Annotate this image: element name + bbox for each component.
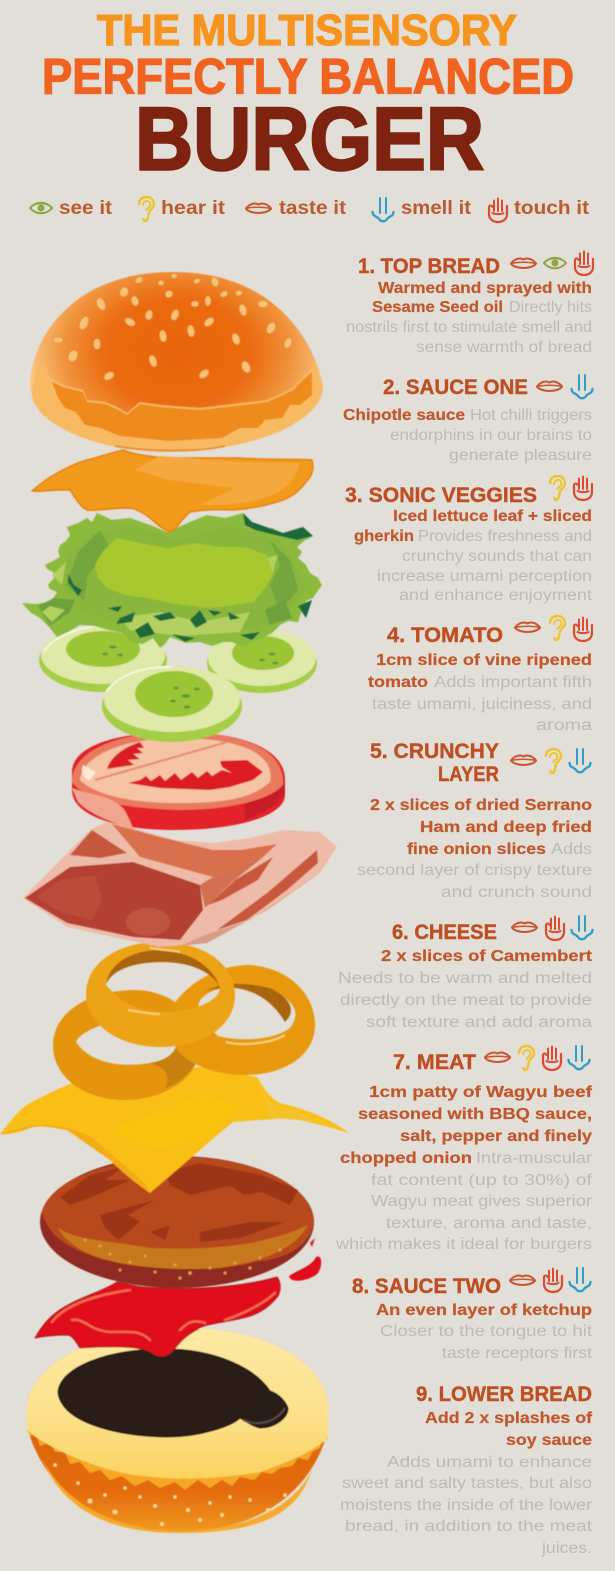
description: salt, pepper and finely [400, 1128, 592, 1145]
description: Wagyu meat gives superior [371, 1193, 592, 1210]
sense icons [511, 252, 593, 275]
legend: smell it [372, 198, 472, 221]
description: Ham and deep fried [420, 819, 592, 836]
sense icons [485, 1046, 590, 1070]
description: Adds umami to enhance [387, 1454, 592, 1471]
description: bread, in addition to the meat [345, 1518, 593, 1535]
description [376, 1302, 593, 1362]
description: 2 x slices of Camembert [381, 948, 592, 965]
description: sweet and salty tastes, but also [342, 1475, 592, 1492]
lower bun [27, 1328, 328, 1533]
description: which makes it ideal for burgers [335, 1236, 592, 1253]
description: directly on the meat to provide [340, 992, 592, 1009]
layer 5: crunchy layer [357, 740, 592, 901]
description: texture, aroma and taste, [386, 1215, 592, 1232]
heading: 4. TOMATO [387, 624, 503, 647]
ham fat over tomato [72, 788, 134, 830]
description: increase umami perception [377, 568, 592, 585]
heading: 6. CHEESE [392, 921, 497, 944]
heading: 3. SONIC VEGGIES [345, 484, 537, 507]
sense icons [515, 616, 592, 641]
layer 7: meat [335, 1046, 593, 1253]
cucumber slices [39, 626, 317, 742]
legend: touch it: touch it [514, 198, 590, 219]
tomato slice [72, 732, 285, 830]
legend: touch it [489, 198, 590, 222]
description: fine onion slices [407, 841, 546, 858]
description: soy sauce [506, 1432, 592, 1449]
description: taste receptors first [442, 1345, 593, 1362]
description: second layer of crispy texture [357, 862, 592, 879]
legend: hear it [139, 197, 226, 221]
description: Warmed and sprayed with [378, 280, 592, 297]
layer 9: lower bread [340, 1383, 593, 1557]
description [354, 508, 593, 604]
description [340, 1410, 593, 1557]
heading: 9. LOWER BREAD [416, 1383, 592, 1406]
description: Adds important fifth [434, 674, 592, 691]
legend: see it [30, 198, 113, 219]
description [335, 1084, 593, 1253]
title: BURGER [135, 88, 484, 188]
description: chopped onion [340, 1150, 472, 1167]
legend: taste it: taste it [279, 198, 347, 219]
burger illustration [0, 272, 349, 1533]
description: juices. [541, 1540, 592, 1557]
description: 1cm slice of vine ripened [376, 652, 592, 669]
onion ring left [53, 990, 200, 1100]
description: nostrils first to stimulate smell and [346, 319, 592, 336]
description: Intra-muscular [476, 1150, 592, 1167]
onion ring right [170, 965, 315, 1075]
description: 1cm patty of Wagyu beef [369, 1084, 593, 1101]
description: Hot chilli triggers [470, 407, 592, 424]
onion ring top [86, 942, 235, 1047]
top bun [30, 272, 323, 452]
title: THE MULTISENSORY [97, 7, 517, 55]
sesame seeds [53, 274, 293, 382]
cucumber middle [102, 666, 242, 742]
cheese slice [0, 1067, 349, 1193]
description: An even layer of ketchup [376, 1302, 592, 1319]
description: soft texture and add aroma [366, 1014, 592, 1031]
description: generate pleasure [449, 447, 592, 464]
description: moistens the inside of the lower [340, 1497, 592, 1514]
layer 8: sauce two [352, 1268, 593, 1362]
heading: 2. SAUCE ONE [383, 376, 528, 399]
sauce one [32, 450, 313, 532]
description: fat content (up to 30%) of [371, 1172, 593, 1189]
description [338, 948, 592, 1031]
heading: 8. SAUCE TWO [352, 1275, 501, 1298]
description: crunchy sounds that can [402, 548, 592, 565]
heading: LAYER [438, 763, 499, 786]
description: seasoned with BBQ sauce, [358, 1106, 592, 1123]
legend: taste it [246, 198, 347, 219]
description: Directly hits [509, 299, 592, 316]
description: Chipotle sauce [343, 407, 465, 424]
description: and crunch sound [441, 884, 592, 901]
description: Provides freshness and [418, 528, 592, 545]
description: 2 x slices of dried Serrano [370, 797, 592, 814]
onion rings [53, 942, 315, 1100]
ketchup drops [289, 1238, 321, 1281]
description: Add 2 x splashes of [425, 1410, 593, 1427]
description: sense warmth of bread [416, 339, 592, 356]
description: Closer to the tongue to hit [380, 1323, 593, 1340]
sense icons [550, 476, 592, 500]
description: taste umami, juiciness, and [372, 696, 592, 713]
layer 4: tomato [368, 616, 592, 734]
heading: 1. TOP BREAD [358, 255, 500, 278]
sense icons [511, 749, 590, 773]
layer 3: sonic veggies [345, 476, 593, 604]
heading: 5. CRUNCHY [370, 740, 499, 763]
cucumber left [39, 626, 167, 692]
sense icons [537, 375, 592, 398]
description [346, 280, 592, 356]
heading [370, 740, 499, 786]
cucumber right [207, 630, 317, 693]
description [368, 652, 592, 734]
description: Sesame Seed oil [372, 299, 503, 316]
description: aroma [536, 717, 592, 734]
description: Adds [551, 841, 592, 858]
sense icons [512, 916, 592, 940]
ketchup [35, 1238, 321, 1356]
description [343, 407, 592, 464]
title [42, 7, 574, 188]
lettuce [22, 513, 322, 648]
layer 2: sauce one [343, 375, 592, 464]
layer 6: cheese [338, 916, 592, 1031]
description [357, 797, 592, 901]
legend of senses [30, 197, 590, 222]
serrano ham [23, 820, 337, 947]
description: endorphins in our brains to [390, 427, 592, 444]
legend: hear it: hear it [161, 198, 226, 219]
description: gherkin [354, 528, 414, 545]
heading: 7. MEAT [393, 1051, 476, 1074]
legend: smell it: smell it [401, 198, 472, 219]
meat patty [40, 1156, 314, 1288]
description: tomato [368, 674, 428, 691]
sense icons [510, 1268, 590, 1292]
description: Needs to be warm and melted [338, 970, 592, 987]
description: and enhance enjoyment [399, 587, 593, 604]
legend: see it: see it [59, 198, 113, 219]
soy sauce [58, 1349, 288, 1437]
layer 1: top bread [346, 252, 593, 356]
description: Iced lettuce leaf + sliced [393, 508, 592, 525]
